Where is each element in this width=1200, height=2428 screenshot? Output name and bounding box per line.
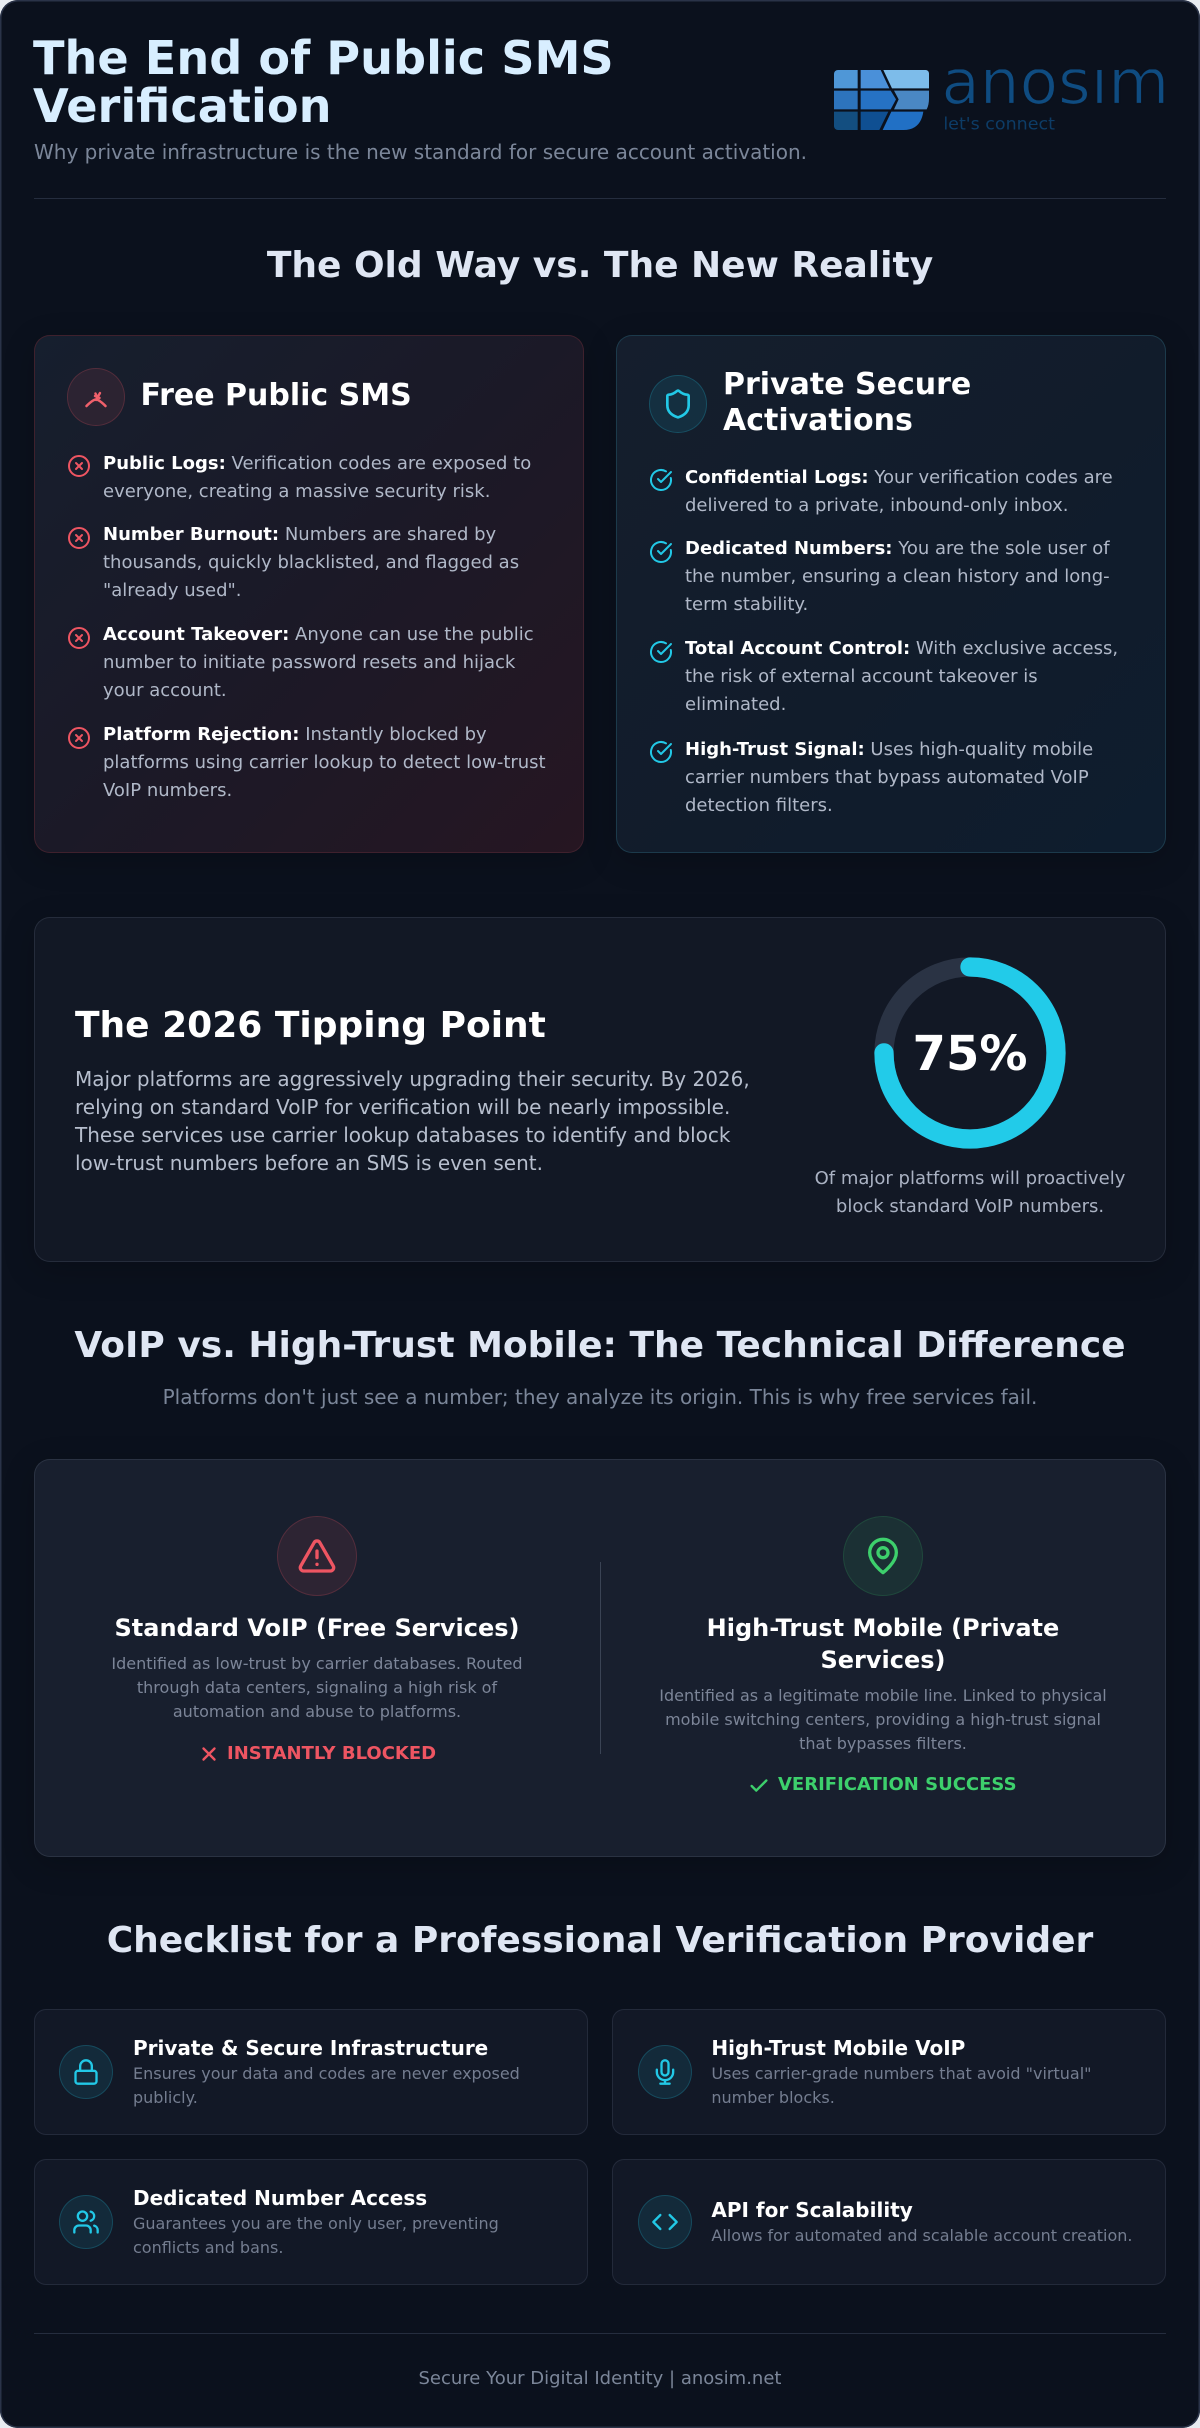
text: platform rejection: Platform Rejection: Instantly blocked by (103, 724, 487, 745)
text: tipping point description: These services use carrier lookup databases to identify and block (75, 1123, 730, 1147)
text: dedicated number description (133, 2214, 499, 2257)
title: high-trust mobile VoIP: High-Trust Mobile VoIP (711, 2036, 965, 2060)
text: high-trust mobile VoIP description: number blocks. (711, 2088, 835, 2107)
text: public logs: Public Logs: Verification codes are exposed to (103, 453, 531, 474)
text: dedicated numbers: Dedicated Numbers: You are the sole user of (685, 538, 1110, 559)
text: number burnout: "already used". (103, 580, 242, 601)
title (33, 31, 614, 133)
text: number burnout: Number Burnout: Numbers are shared by (103, 524, 496, 545)
text: total account control: eliminated. (685, 694, 786, 715)
heading: private secure activations (723, 367, 971, 438)
text: public logs (103, 453, 531, 502)
logo: anosim: let's connect (943, 114, 1055, 133)
status: instantly blocked: INSTANTLY BLOCKED (227, 1743, 436, 1764)
card: dedicated number access (34, 2159, 588, 2285)
icon: x (202, 1747, 216, 1761)
text: high-trust signal (685, 738, 1093, 816)
text: high-trust signal: detection filters. (685, 794, 833, 816)
text: standard VoIP description (111, 1654, 523, 1721)
icon: x circle (68, 727, 90, 749)
text: dedicated number description: Guarantees you are the only user, preventing (133, 2214, 499, 2233)
text: confidential logs (685, 466, 1113, 516)
text: tipping point description: Major platforms are aggressively upgrading their security. By 2026, (75, 1067, 750, 1091)
caption: donut: Of major platforms will proactively (815, 1168, 1125, 1189)
icon: lock badge (59, 2045, 113, 2099)
text: tipping point description (74, 1067, 750, 1175)
icon: check circle (650, 540, 672, 563)
heading: standard VoIP: Standard VoIP (Free Services) (114, 1614, 520, 1642)
text: dedicated numbers: the number, ensuring a clean history and long- (685, 566, 1110, 587)
heading: tipping point: The 2026 Tipping Point (75, 1005, 546, 1046)
title: dedicated number access: Dedicated Number Access (133, 2186, 427, 2210)
text: platform rejection: VoIP numbers. (103, 780, 232, 801)
icon: x circle (68, 455, 90, 477)
icon: x circle (68, 627, 90, 649)
title: private and secure infrastructure: Private & Secure Infrastructure (133, 2036, 488, 2060)
text: high-trust mobile description: mobile switching centers, providing a high-trust signal (665, 1710, 1101, 1729)
icon: shield badge (649, 375, 707, 433)
icon: red badge (67, 368, 125, 426)
title: Verification (33, 79, 331, 133)
text: high-trust signal: carrier numbers that bypass automated VoIP (685, 766, 1089, 788)
heading: old way vs new reality: The Old Way vs. The New Reality (267, 244, 933, 286)
text: standard VoIP description: through data centers, signaling a high risk of (137, 1678, 497, 1697)
icon: check circle (650, 468, 672, 491)
heading: high-trust mobile: Services) (820, 1646, 946, 1674)
text: API description: Allows for automated and scalable account creation. (711, 2226, 1133, 2245)
text: tipping point description: low-trust numbers before an SMS is even sent. (75, 1151, 543, 1175)
caption: donut: block standard VoIP numbers. (836, 1196, 1104, 1217)
text: number burnout: thousands, quickly blacklisted, and flagged as (103, 552, 519, 573)
text: standard VoIP description: Identified as low-trust by carrier databases. Routed (111, 1654, 523, 1673)
text: standard VoIP description: automation and abuse to platforms. (173, 1702, 461, 1721)
text: high-trust signal: High-Trust Signal: Uses high-quality mobile (685, 738, 1093, 760)
title: The End of Public SMS (33, 31, 614, 85)
text: number burnout (103, 524, 519, 601)
text: private and secure description (133, 2064, 520, 2107)
text: private and secure description: publicly. (133, 2088, 198, 2107)
text: account takeover: Account Takeover: Anyone can use the public (103, 624, 534, 645)
icon: check circle (650, 740, 672, 763)
text: high-trust mobile description (659, 1686, 1107, 1753)
text: total account control: Total Account Control: With exclusive access, (685, 638, 1118, 659)
panel: private secure activations (616, 335, 1166, 853)
heading: high-trust mobile: High-Trust Mobile (Private (707, 1614, 1059, 1642)
status: verification success: VERIFICATION SUCCESS (778, 1774, 1017, 1795)
text: high-trust mobile VoIP description: Uses carrier-grade numbers that avoid "virtual" (711, 2064, 1092, 2083)
text: total account control: the risk of external account takeover is (685, 666, 1038, 687)
heading: private secure activations: Activations (723, 403, 913, 438)
text: high-trust mobile description: that bypasses filters. (799, 1734, 967, 1753)
card: API for scalability (612, 2159, 1166, 2285)
caption: donut (815, 1168, 1125, 1217)
footer: Secure Your Digital Identity | anosim.net (418, 2368, 781, 2389)
icon: warning triangle badge (277, 1516, 357, 1596)
text: account takeover: your account. (103, 680, 227, 701)
icon: x circle (68, 527, 90, 549)
text: high-trust mobile VoIP description (711, 2064, 1092, 2107)
subtitle: Why private infrastructure is the new standard for secure account activation. (34, 140, 807, 164)
text: public logs: everyone, creating a massive security risk. (103, 481, 490, 502)
text: confidential logs: delivered to a private, inbound-only inbox. (685, 494, 1068, 516)
panel: 2026 tipping point (34, 917, 1166, 1262)
card: high-trust mobile VoIP (612, 2009, 1166, 2135)
subheading: technical difference: Platforms don't just see a number; they analyze its origin. This is why free services fail. (163, 1385, 1037, 1409)
heading: free public SMS: Free Public SMS (140, 378, 412, 413)
text: total account control (685, 638, 1118, 715)
chart: 75% donut (874, 957, 1066, 1149)
heading: checklist: Checklist for a Professional Verification Provider (107, 1920, 1093, 1960)
icon: check circle (650, 640, 672, 663)
text: dedicated numbers (685, 538, 1110, 615)
icon: check (750, 1779, 768, 1792)
icon: users badge (59, 2195, 113, 2249)
logo: anosim (834, 69, 1164, 133)
text: high-trust mobile description: Identified as a legitimate mobile line. Linked to physical (659, 1686, 1107, 1705)
text: account takeover: number to initiate password resets and hijack (103, 652, 515, 673)
text: platform rejection: platforms using carrier lookup to detect low-trust (103, 752, 546, 773)
heading: private secure activations: Private Secure (723, 367, 971, 402)
stat: 75%: 75% (913, 1026, 1027, 1082)
panel: free public SMS (34, 335, 584, 853)
text: dedicated number description: conflicts and bans. (133, 2238, 283, 2257)
text: confidential logs: Confidential Logs: Your verification codes are (685, 466, 1113, 488)
text: account takeover (103, 624, 534, 701)
card: private and secure infrastructure (34, 2009, 588, 2135)
icon: code badge (638, 2195, 692, 2249)
title: API for scalability: API for Scalability (711, 2198, 913, 2222)
icon: map pin badge (843, 1516, 923, 1596)
panel: VoIP comparison (34, 1459, 1166, 1857)
text: platform rejection (103, 724, 546, 801)
text: private and secure description: Ensures your data and codes are never exposed (133, 2064, 520, 2083)
heading: high-trust mobile (707, 1614, 1059, 1674)
text: tipping point description: relying on standard VoIP for verification will be nearly impossible. (75, 1095, 730, 1119)
heading: technical difference: VoIP vs. High-Trust Mobile: The Technical Difference (74, 1325, 1126, 1366)
text: dedicated numbers: term stability. (685, 594, 808, 615)
icon: microphone badge (638, 2045, 692, 2099)
